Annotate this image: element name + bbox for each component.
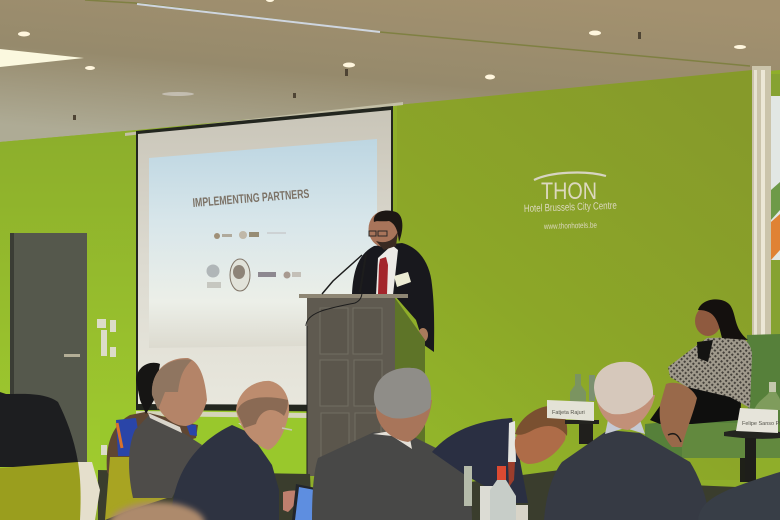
man in grey jacket: [129, 358, 207, 498]
wall switches: [97, 319, 116, 455]
slide title: IMPLEMENTING PARTNERS: [192, 187, 310, 210]
white table cloth: [78, 462, 100, 520]
projection screen: [125, 102, 403, 418]
pillar and banner: [752, 66, 780, 339]
man with white hair from behind: [544, 362, 709, 520]
seated woman: [650, 299, 752, 447]
rear table with bottles and name card: [547, 374, 599, 444]
table items with bottles: [464, 466, 528, 520]
speaker jacket: [352, 243, 434, 352]
right green wall: [397, 70, 752, 480]
tablet: [292, 484, 316, 520]
chair behind woman: [105, 457, 170, 520]
man bending forward: [432, 406, 567, 503]
green armchair: [645, 334, 780, 482]
foreground shoulder right: [698, 472, 780, 520]
man in navy jacket: [171, 381, 304, 520]
ceiling: [0, 0, 780, 142]
right table and bottle: [724, 382, 780, 482]
speaker: [352, 210, 434, 352]
floor: [98, 470, 760, 520]
left green wall: [0, 130, 137, 480]
door: [10, 233, 87, 463]
wall below screen: [100, 410, 400, 475]
hotel wall logo: THON: [541, 178, 597, 205]
woman behind in blue dress: [107, 363, 198, 480]
hotel wall logo: [524, 173, 617, 231]
microphone and cable: [306, 254, 366, 478]
podium: [299, 254, 425, 478]
hotel wall logo: Hotel Brussels City Centre: [524, 200, 617, 215]
chair left: [0, 462, 81, 520]
left seated man in black: [0, 392, 78, 467]
banner: [771, 96, 780, 260]
projected slide: [149, 139, 377, 348]
blurred foreground head: [109, 502, 205, 520]
partner logos: [206, 231, 301, 291]
man with grey hair: [312, 368, 472, 520]
hotel wall logo: www.thonhotels.be: [543, 221, 597, 231]
name card: Fatjeta Rajuri: [552, 410, 585, 416]
